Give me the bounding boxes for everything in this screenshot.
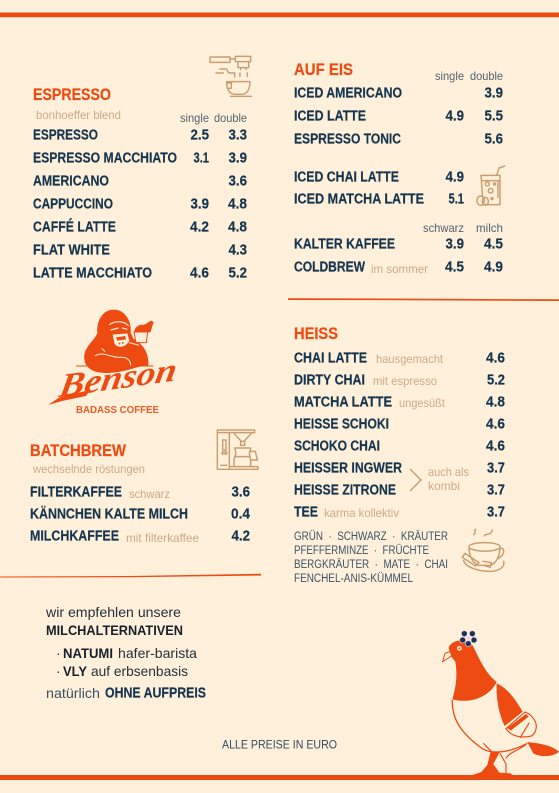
row: cappuccino: CAPPUCCINO [33, 196, 113, 212]
illustration: pigeon with flower [443, 631, 559, 776]
row: espresso tonic: ESPRESSO TONIC [294, 131, 401, 147]
row: latte macchiato: 4.6 [190, 265, 209, 281]
row: coldbrew: 4.5 [445, 259, 464, 275]
row: flat white: FLAT WHITE [33, 242, 110, 258]
row: espresso macchiato: 3.9 [228, 150, 247, 166]
row: kalter kaffee: 4.5 [484, 236, 503, 252]
row: heisse zitrone: 3.7 [487, 482, 505, 498]
note: auch als kombi: kombi [428, 479, 460, 493]
row: latte macchiato [33, 265, 247, 281]
row: heisse schoki [294, 416, 505, 432]
text: tea varieties: PFEFFERMINZE · FRÜCHTE [294, 545, 429, 557]
row: milchkaffee: mit filterkaffee [126, 531, 199, 545]
row: espresso tonic: 5.6 [484, 131, 503, 147]
row: chai latte: 4.6 [486, 350, 505, 366]
heading: heiss: HEISS [294, 325, 338, 343]
row: iced chai latte: 4.9 [446, 169, 464, 185]
icon: espresso machine [210, 56, 251, 96]
row: iced americano: 3.9 [484, 85, 503, 101]
row: espresso: 3.3 [228, 127, 247, 143]
row: milchkaffee: MILCHKAFFEE [30, 528, 119, 544]
column label: schwarz: schwarz [423, 221, 464, 235]
row: heisse zitrone: HEISSE ZITRONE [294, 482, 396, 498]
row: heisse zitrone [294, 482, 505, 498]
row: tee: 3.7 [487, 504, 505, 520]
note: wechselnde roestungen: wechselnde röstungen [32, 462, 145, 476]
row: flat white: 4.3 [228, 242, 247, 258]
row: americano: AMERICANO [33, 173, 109, 189]
icon: tea cup with cinnamon [462, 529, 504, 571]
row: espresso macchiato: 3.1 [194, 150, 209, 166]
panel: benson logo [48, 310, 180, 416]
row: iced americano [294, 85, 503, 101]
row: iced latte: 5.5 [484, 108, 503, 124]
text: ohne aufpreis: natürlich [46, 685, 100, 701]
row: tee: karma kollektiv [324, 506, 399, 520]
row: dirty chai: DIRTY CHAI [294, 372, 365, 388]
footer note: ALLE PREISE IN EURO [222, 738, 337, 752]
row: iced latte [294, 108, 503, 124]
logo swash [48, 390, 90, 405]
row: cappuccino [33, 196, 247, 212]
row: coldbrew: COLDBREW [294, 259, 365, 275]
row: caffe latte: 4.2 [190, 219, 209, 235]
row: heisse schoki: HEISSE SCHOKI [294, 416, 389, 432]
note: auch als kombi [428, 465, 469, 493]
row: dirty chai [294, 372, 505, 388]
divider: left [0, 574, 261, 578]
list item: natumi: hafer-barista [118, 645, 197, 661]
panel: espresso [33, 56, 251, 281]
row: milchkaffee [30, 528, 250, 545]
row: chai latte: hausgemacht [376, 352, 444, 366]
row: iced latte: ICED LATTE [294, 108, 366, 124]
text: ohne aufpreis: OHNE AUFPREIS [105, 685, 206, 701]
note: bonhoeffer blend: bonhoeffer blend [36, 108, 121, 122]
row: coldbrew: 4.9 [484, 259, 503, 275]
row: caffe latte [33, 218, 247, 235]
heading: espresso: ESPRESSO [33, 86, 111, 104]
column label: single: single [180, 111, 209, 125]
row: heisser ingwer: 3.7 [487, 460, 505, 476]
icon: iced drink [477, 166, 505, 205]
row: tee [294, 504, 505, 520]
column label: milch: milch [476, 221, 503, 235]
row: espresso: 2.5 [190, 127, 209, 143]
text: milchalternativen: MILCHALTERNATIVEN [46, 622, 183, 638]
icon: filter coffee machine [217, 430, 258, 469]
row: iced americano: ICED AMERICANO [294, 85, 402, 101]
row: matcha latte [294, 394, 505, 410]
text: tea varieties [294, 531, 448, 585]
list item: natumi: NATUMI [63, 645, 113, 661]
row: kalter kaffee: 3.9 [446, 236, 464, 252]
list item: vly: VLY [63, 663, 88, 679]
row: iced latte: 4.9 [446, 108, 464, 124]
row: americano [33, 173, 247, 189]
row: latte macchiato: 5.2 [228, 265, 247, 281]
logo tagline: BADASS COFFEE [76, 404, 159, 416]
heading: auf eis: AUF EIS [294, 61, 353, 79]
row: latte macchiato: LATTE MACCHIATO [33, 265, 152, 281]
row: caffe latte: 4.8 [228, 219, 247, 235]
list item: vly: · [56, 663, 61, 679]
row: chai latte: CHAI LATTE [294, 350, 367, 366]
column label: double: double [470, 69, 503, 83]
row: caffe latte: CAFFÉ LATTE [33, 218, 116, 235]
row: espresso [33, 127, 247, 143]
row: iced chai latte: ICED CHAI LATTE [294, 169, 399, 185]
row: filterkaffee: 3.6 [232, 484, 250, 500]
row: flat white [33, 242, 247, 258]
panel: auf eis [294, 61, 505, 276]
row: milchkaffee: 4.2 [232, 528, 250, 544]
row: filterkaffee: schwarz [129, 487, 170, 501]
row: kalter kaffee: KALTER KAFFEE [294, 236, 395, 252]
row: iced matcha latte: ICED MATCHA LATTE [294, 191, 424, 207]
row: matcha latte: 4.8 [486, 394, 505, 410]
row: espresso tonic [294, 131, 503, 147]
list item: natumi: · [56, 645, 61, 661]
row: kaennchen kalte milch: KÄNNCHEN KALTE MILCH [30, 505, 188, 522]
list item: natumi [56, 645, 197, 661]
row: kaennchen kalte milch: 0.4 [231, 506, 250, 522]
panel: heiss [294, 325, 505, 585]
bottom bar [0, 775, 559, 780]
row: kalter kaffee [294, 236, 503, 252]
row: schoko chai: SCHOKO CHAI [294, 438, 380, 454]
divider: right [288, 298, 559, 301]
row: chai latte [294, 350, 505, 366]
row: heisse schoki: 4.6 [486, 416, 505, 432]
row: coldbrew: im sommer [371, 262, 428, 276]
row: espresso: ESPRESSO [33, 127, 98, 143]
row: tee: TEE [294, 504, 318, 520]
row: cappuccino: 3.9 [190, 196, 209, 212]
row: americano: 3.6 [228, 173, 247, 189]
text: tea varieties: BERGKRÄUTER · MATE · CHAI [294, 559, 448, 571]
icon: gorilla with mug [76, 310, 154, 373]
column label: single: single [435, 69, 464, 83]
row: matcha latte: ungesüßt [399, 396, 446, 410]
text: tea varieties: FENCHEL-ANIS-KÜMMEL [294, 573, 414, 585]
text: intro: wir empfehlen unsere [45, 604, 181, 620]
panel: batchbrew [30, 430, 258, 545]
row: schoko chai: 4.6 [486, 438, 505, 454]
note: auch als kombi: auch als [428, 465, 469, 479]
row: iced matcha latte: 5.1 [448, 191, 464, 207]
list item: vly: auf erbsenbasis [91, 663, 188, 679]
row: coldbrew [294, 259, 503, 276]
arrow: chevron to kombi note [410, 469, 421, 491]
text: ohne aufpreis [46, 685, 206, 701]
row: dirty chai: mit espresso [373, 374, 437, 388]
row: heisser ingwer [294, 460, 505, 476]
panel: milk alternatives [45, 604, 206, 701]
column label: double: double [214, 111, 247, 125]
row: matcha latte: MATCHA LATTE [294, 394, 392, 410]
row: schoko chai [294, 438, 505, 454]
row: heisser ingwer: HEISSER INGWER [294, 460, 402, 476]
row: filterkaffee: FILTERKAFFEE [30, 484, 122, 500]
text: tea varieties: GRÜN · SCHWARZ · KRÄUTER [294, 531, 448, 543]
logo wordmark: Benson: Benson [56, 350, 180, 405]
top bar [0, 12, 559, 17]
row: filterkaffee [30, 484, 250, 501]
row: cappuccino: 4.8 [228, 196, 247, 212]
row: espresso macchiato: ESPRESSO MACCHIATO [33, 150, 177, 166]
heading: batchbrew: BATCHBREW [30, 442, 126, 460]
row: dirty chai: 5.2 [487, 372, 505, 388]
